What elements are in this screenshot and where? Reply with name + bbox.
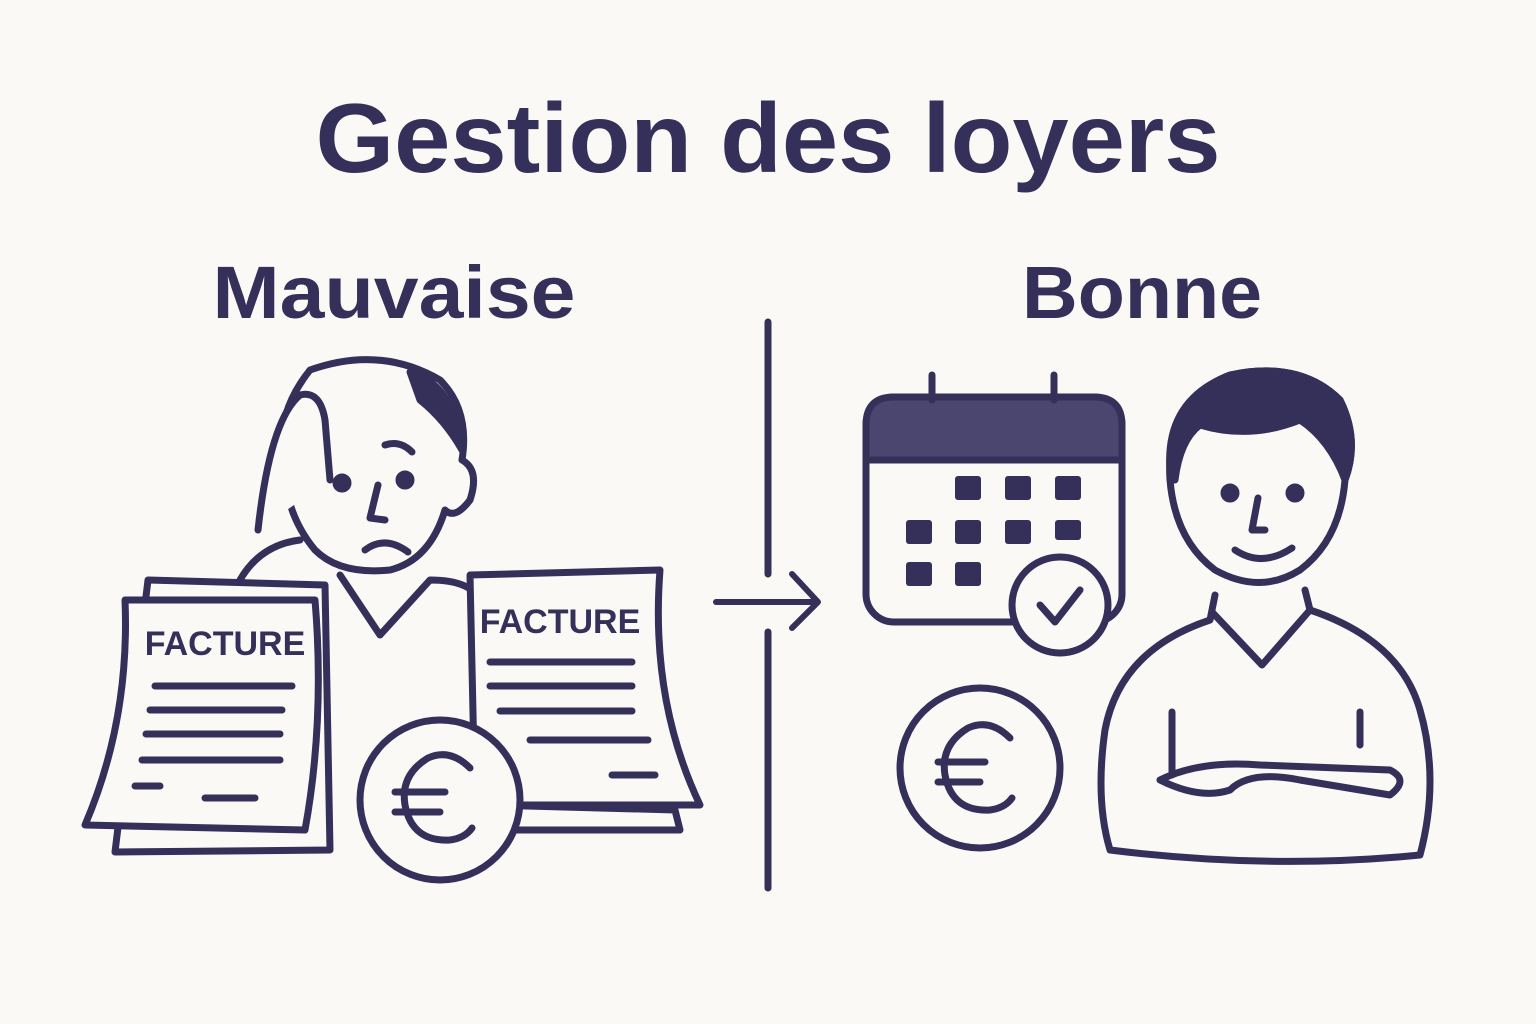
title: Gestion des loyers — [316, 83, 1220, 193]
euro coin — [360, 720, 520, 880]
divider — [764, 322, 772, 888]
stressed man — [240, 360, 480, 635]
panel: good management — [866, 371, 1430, 861]
arrow — [716, 574, 818, 628]
text: FACTURE — [480, 603, 640, 641]
calm man — [1101, 371, 1430, 861]
invoice left — [85, 580, 330, 852]
invoice labels: FACTURE — [145, 625, 305, 663]
euro coin — [900, 688, 1060, 848]
invoice right — [470, 570, 700, 830]
panel: bad management — [85, 360, 700, 880]
calendar — [866, 375, 1122, 653]
heading: Mauvaise: Mauvaise — [212, 251, 576, 334]
heading: Bonne: Bonne — [1022, 251, 1262, 334]
